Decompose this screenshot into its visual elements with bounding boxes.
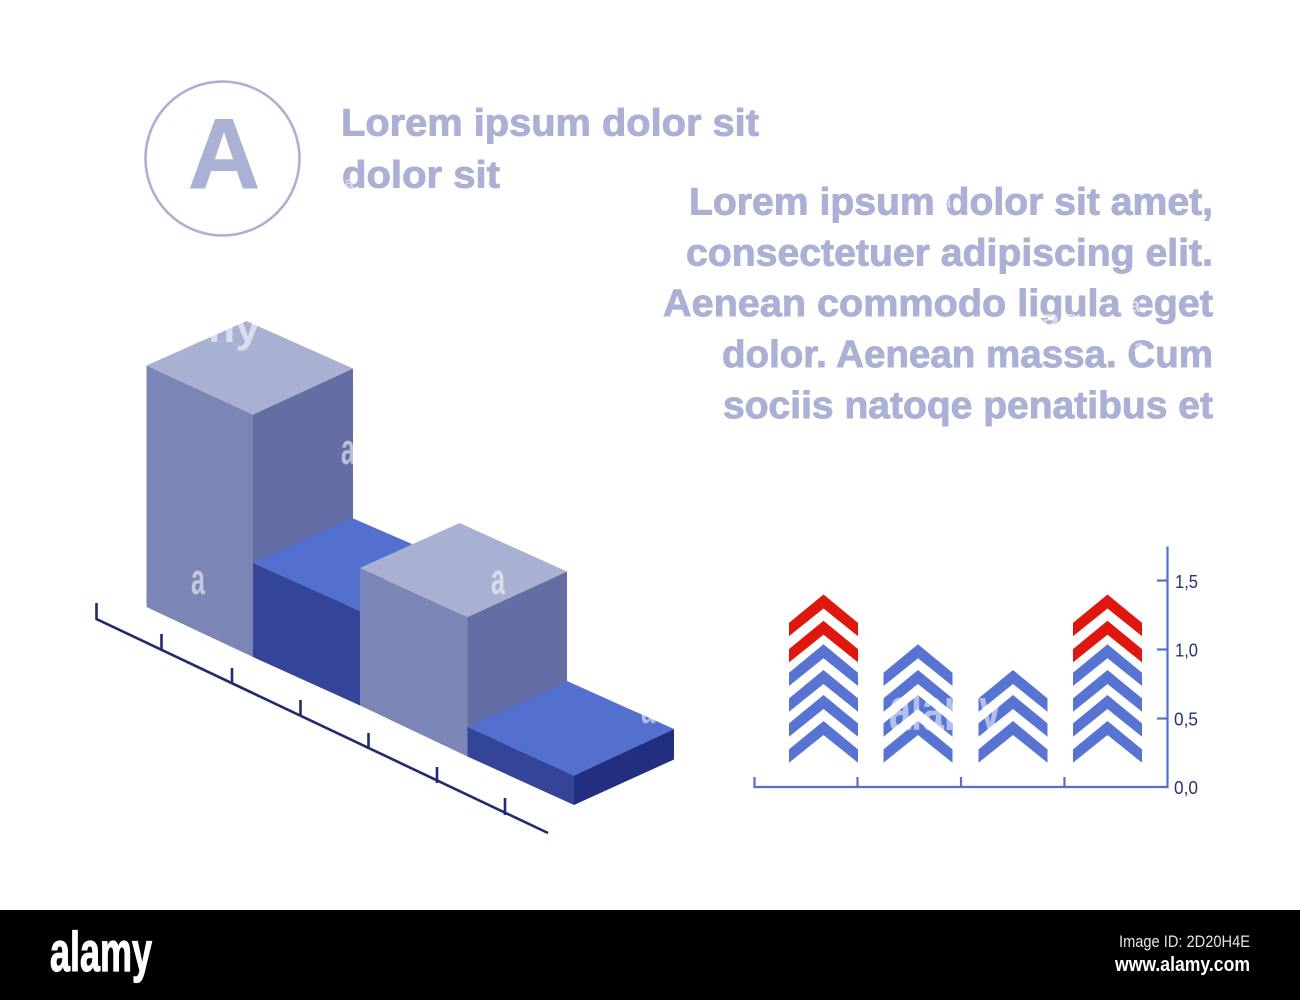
column 4 chevrons xyxy=(1073,594,1142,763)
stock watermark fragments: a xyxy=(491,555,505,604)
heading: Lorem ipsum dolor sit xyxy=(341,102,759,144)
column 1 chevrons xyxy=(789,594,858,763)
chevron chart xyxy=(754,546,1198,798)
chart axes xyxy=(754,546,1168,787)
axis value labels: 1,0 xyxy=(1175,640,1198,660)
column 2 chevrons xyxy=(884,644,952,763)
heading: dolor sit xyxy=(342,154,500,196)
bar 1: tall grey-blue xyxy=(146,321,353,657)
axis value labels: 0,0 xyxy=(1174,778,1198,798)
isometric axis xyxy=(96,603,548,833)
body text block: sociis natoqe penatibus et xyxy=(723,385,1213,427)
stock watermark fragments: a xyxy=(341,425,355,474)
icon: letter A badge xyxy=(146,82,300,236)
body text block: consectetuer adipiscing elit. xyxy=(686,232,1213,274)
stock watermark fragments: alamy xyxy=(889,676,1001,743)
stock watermark fragments: a xyxy=(1130,295,1141,317)
footer bar xyxy=(0,910,1300,1000)
stock watermark fragments: a xyxy=(943,191,952,213)
stock watermark fragments: ny xyxy=(208,304,261,351)
stock watermark fragments: a xyxy=(1134,337,1145,359)
body text block: Lorem ipsum dolor sit amet, xyxy=(689,182,1213,224)
footer logo: alamy xyxy=(50,920,152,983)
body text block: dolor. Aenean massa. Cum xyxy=(722,334,1213,376)
axis value labels xyxy=(1174,572,1198,798)
bar 3: medium grey-blue xyxy=(360,523,567,756)
bar 2: blue xyxy=(253,518,412,706)
body text block: Aenean commodo ligula eget xyxy=(663,283,1213,325)
column 3 chevrons xyxy=(978,670,1048,763)
stock watermark fragments: a xyxy=(641,690,656,731)
bar 4: short blue xyxy=(468,681,674,805)
icon: letter A badge: A xyxy=(188,98,260,209)
stock watermark fragments xyxy=(191,175,1145,743)
body text block xyxy=(663,182,1213,427)
stock watermark fragments: a xyxy=(344,175,354,192)
axis value labels: 0,5 xyxy=(1174,710,1198,730)
stock watermark fragments: aa xyxy=(1040,306,1081,331)
footer url: www.alamy.com xyxy=(1114,954,1250,976)
footer image id: Image ID: 2D20H4E xyxy=(1119,932,1250,951)
isometric bar chart xyxy=(96,321,674,833)
stock watermark fragments: a xyxy=(191,555,205,604)
axis value labels: 1,5 xyxy=(1175,572,1198,592)
heading xyxy=(341,102,759,196)
